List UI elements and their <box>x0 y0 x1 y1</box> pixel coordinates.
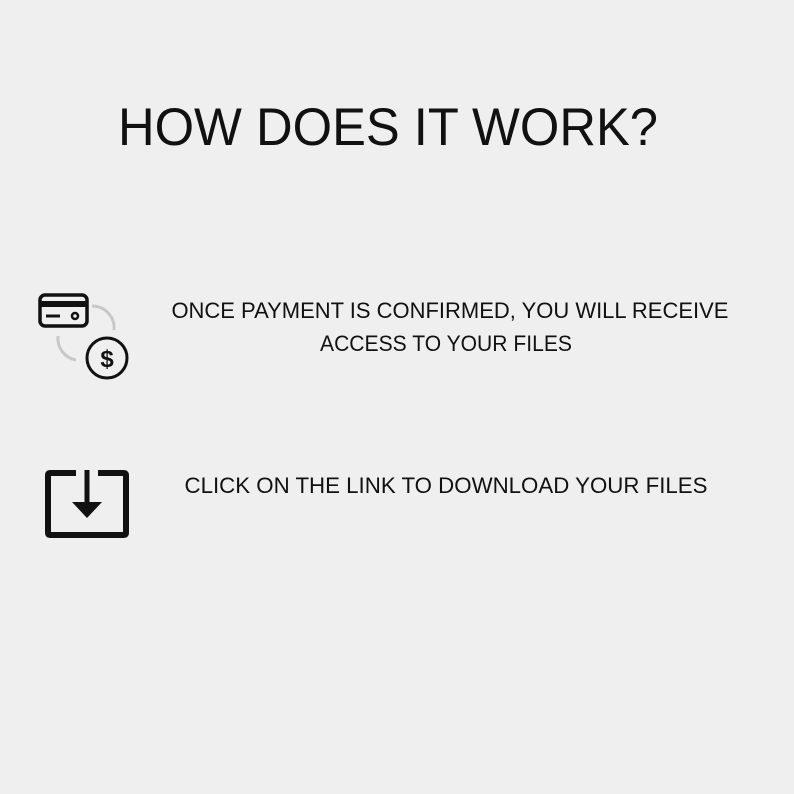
icon: download <box>48 470 126 535</box>
text: step 2: CLICK ON THE LINK TO DOWNLOAD YOUR FILES <box>184 473 708 498</box>
text: step 1: ONCE PAYMENT IS CONFIRMED, YOU WILL RECEIVE <box>171 298 728 323</box>
title: HOW DOES IT WORK? <box>118 98 658 157</box>
text: step 1: ACCESS TO YOUR FILES <box>320 331 572 356</box>
icon: card payment <box>40 295 127 378</box>
icon: card payment: $ <box>100 346 114 373</box>
